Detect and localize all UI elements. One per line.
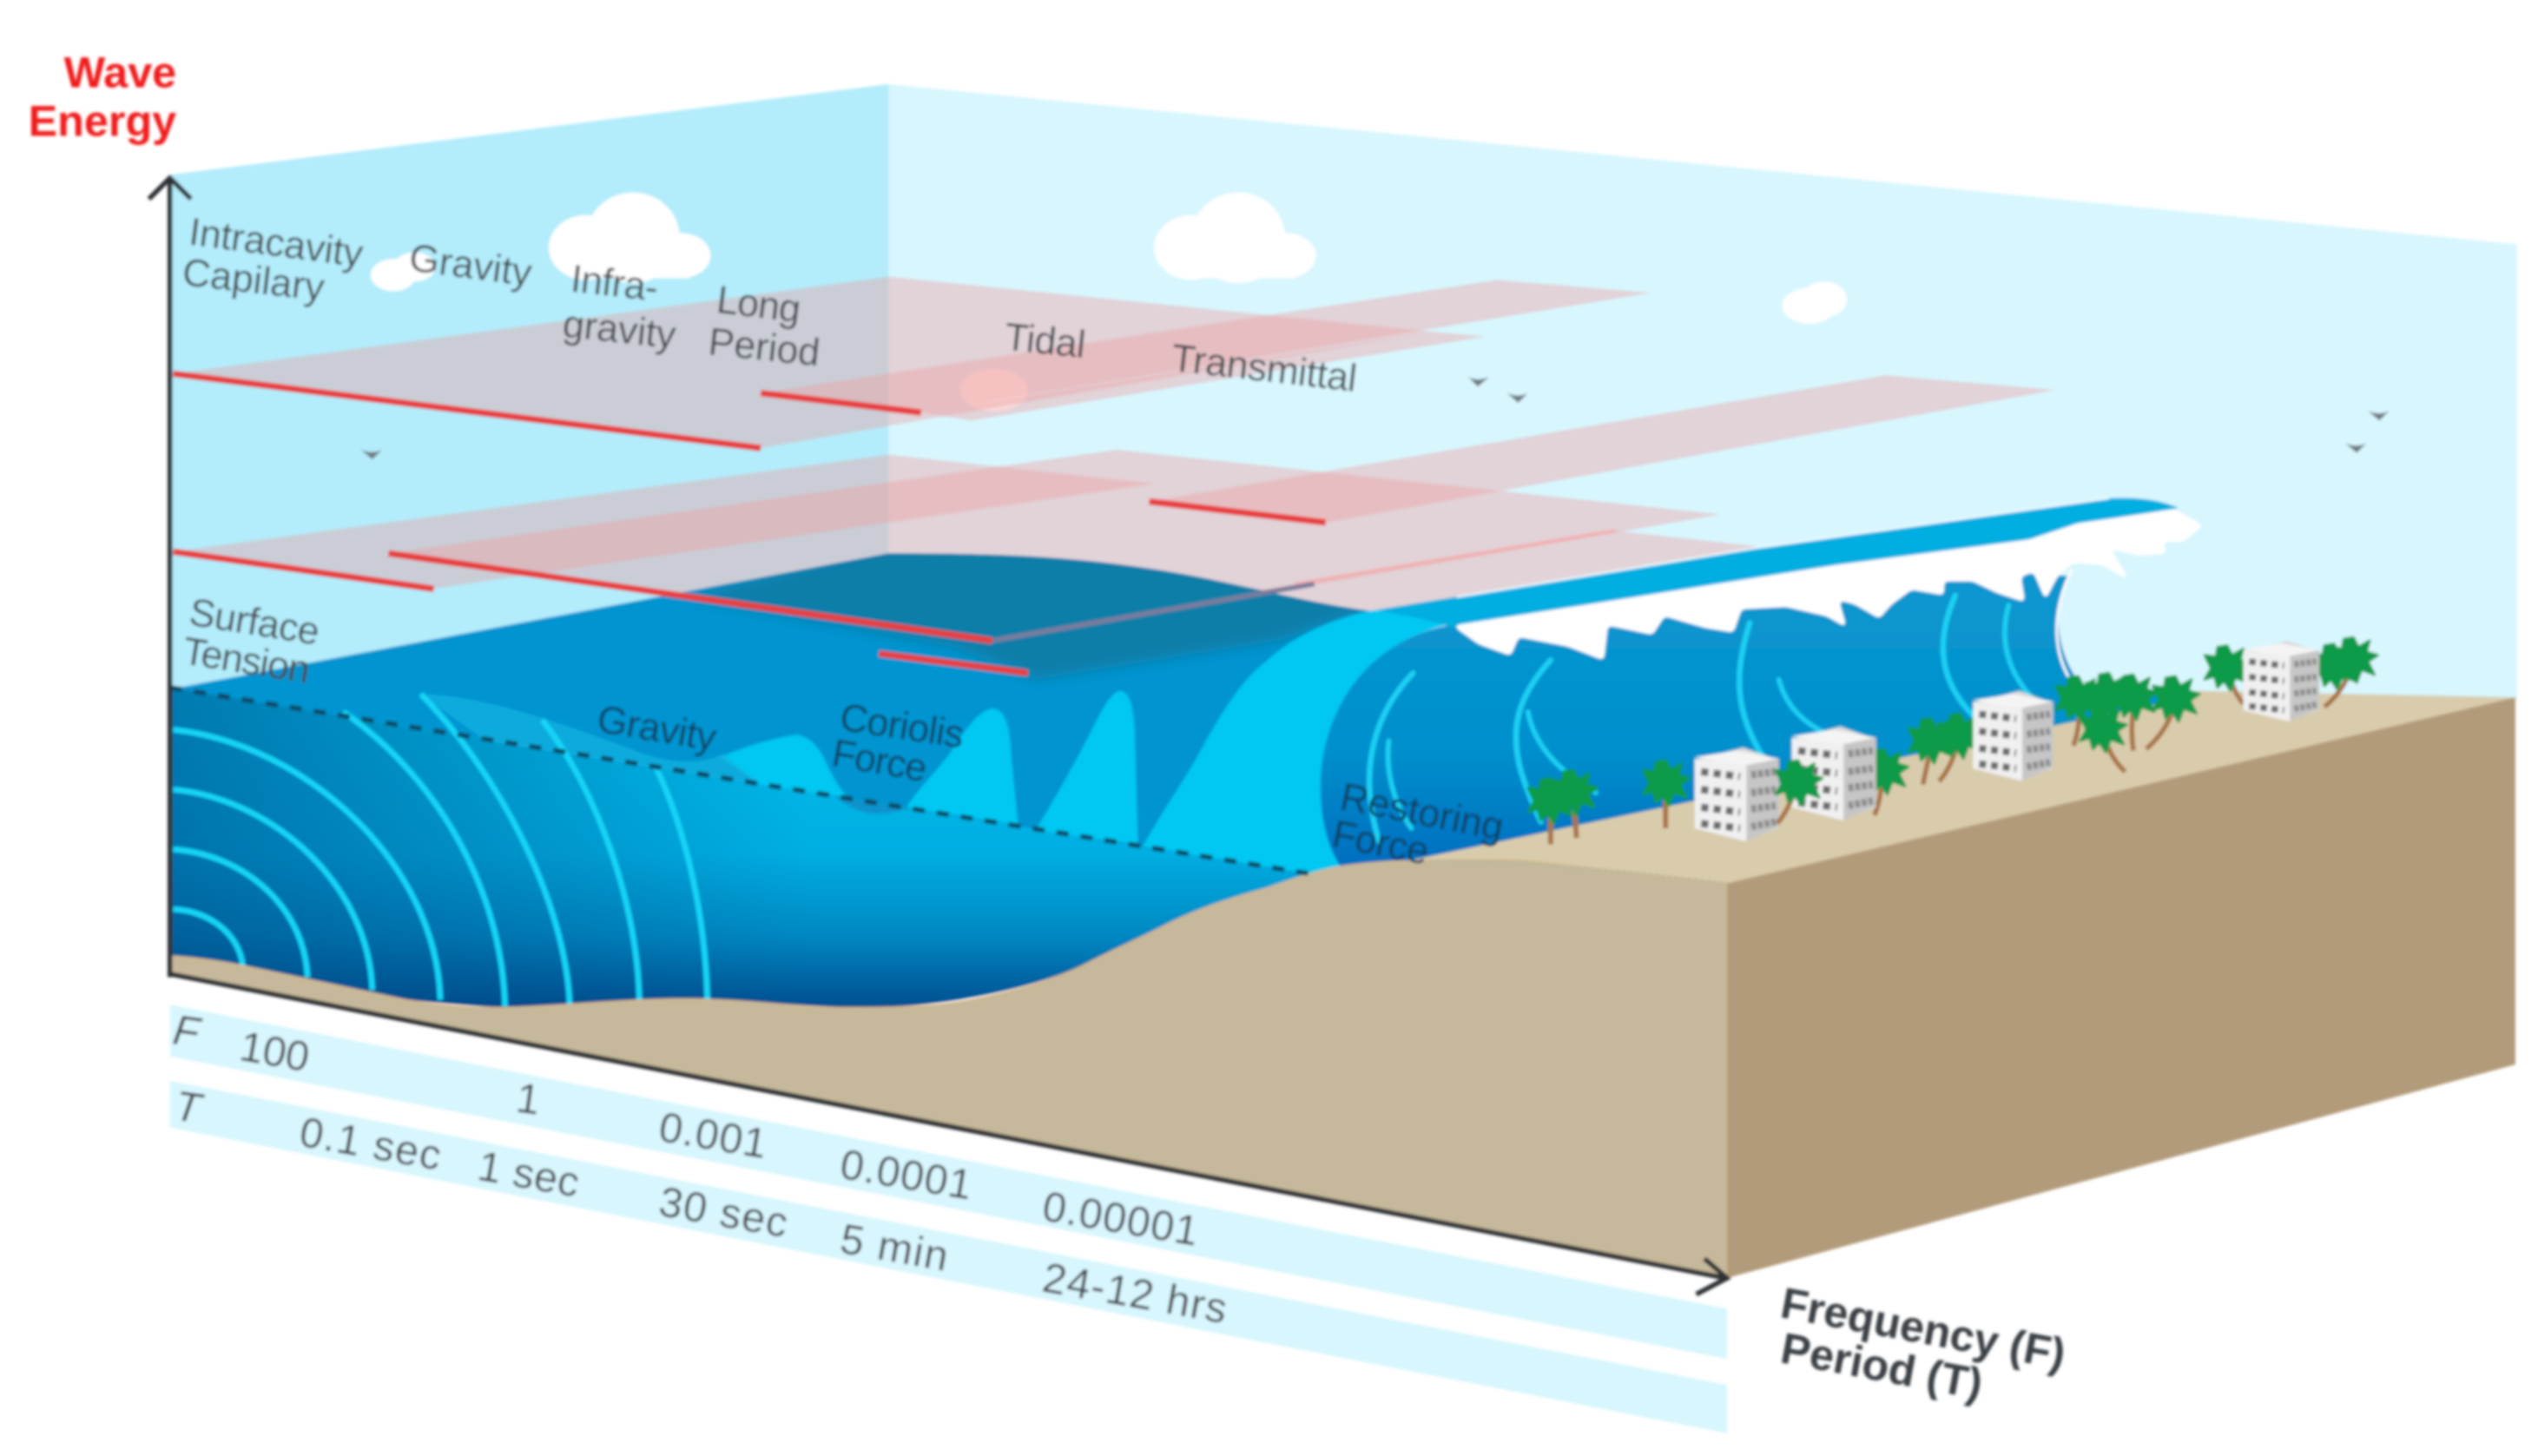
cloud: small left <box>371 253 435 291</box>
palm group around building 4 <box>2205 637 2377 707</box>
streak <box>1369 673 1413 841</box>
label: long period: Long <box>715 279 803 331</box>
arc 3 <box>173 789 372 990</box>
label: coriolis force: Force <box>829 732 930 790</box>
palm <box>1643 761 1690 828</box>
plane: transmittal band <box>1150 375 2055 523</box>
period scale values: 5 min <box>837 1216 952 1281</box>
horizontal axis arrow <box>170 974 1727 1295</box>
wave type labels <box>180 211 1507 873</box>
plane: intracavity capillary and gravity <box>173 277 1433 448</box>
red line 1 <box>173 373 761 448</box>
vertical axis arrow <box>149 178 191 977</box>
red line 2 <box>761 393 921 412</box>
gravity swell shoulder <box>421 694 761 785</box>
axis title: frequency and period: Period (T) <box>1777 1323 1987 1409</box>
palm in front of buildings <box>1776 761 1823 823</box>
bird <box>361 450 382 459</box>
birds <box>361 377 2389 459</box>
label: coriolis force <box>829 696 966 790</box>
frequency scale values: 100 <box>236 1023 313 1081</box>
muted edge of lower plane over water <box>992 584 1315 641</box>
beach top surface <box>1337 691 2515 885</box>
palm group near restoring force <box>1528 770 1598 845</box>
palm group behind building 2 <box>1862 714 1984 815</box>
scale band: period <box>170 1081 1727 1433</box>
cloud: large centre <box>1154 193 1316 283</box>
coriolis dip lobe <box>834 796 920 814</box>
period scale values <box>172 1083 1230 1333</box>
swell peaks <box>721 609 1457 875</box>
red line 4 <box>388 553 992 641</box>
sand cross-section front face <box>170 860 1727 1278</box>
red energy lines <box>173 373 1326 673</box>
clouds <box>371 193 1847 411</box>
red line 5 <box>1150 502 1326 523</box>
label: restoring force: Force <box>1328 813 1433 873</box>
building 4 <box>2244 641 2319 721</box>
label: infragravity <box>561 258 678 357</box>
label: transmittal: Transmittal <box>1170 337 1359 400</box>
label: long period: Period <box>707 320 822 374</box>
plane: tidal secondary band <box>921 332 1486 420</box>
bird <box>2345 444 2366 453</box>
water front face <box>170 688 1343 1008</box>
dark back water wedge <box>686 542 1392 680</box>
cloud: small behind plane <box>959 369 1028 411</box>
frequency scale values: 1 <box>513 1075 543 1124</box>
streak <box>1516 660 1551 822</box>
label: intracavity capillary: Capilary <box>181 251 327 310</box>
label: long period <box>707 279 822 374</box>
label: infragravity: gravity <box>561 303 678 357</box>
label: gravity: Gravity <box>406 237 535 295</box>
plane: tidal band <box>761 280 1651 412</box>
label: coriolis force: Coriolis <box>837 696 966 756</box>
streak <box>1528 712 1596 793</box>
label: infragravity: Infra- <box>569 258 661 310</box>
frequency scale values: 0.00001 <box>1039 1183 1202 1255</box>
label: intracavity capillary: Intracavity <box>187 211 366 276</box>
red line 3 <box>173 551 434 589</box>
plane: gravity band <box>388 450 1721 641</box>
beach dotted transition <box>1429 860 1727 883</box>
red line 6 <box>879 654 1028 673</box>
period scale values: 1 sec <box>474 1143 583 1207</box>
label: surface tension: Surface <box>187 591 322 654</box>
palm group behind building 3 <box>2055 673 2199 772</box>
energy planes <box>173 277 2055 673</box>
building 2 <box>1792 727 1876 820</box>
streak <box>2005 605 2033 699</box>
arc 8 <box>656 767 708 1000</box>
frequency scale values: 0.0001 <box>837 1141 975 1209</box>
period scale values: 24-12 hrs <box>1039 1255 1230 1333</box>
wave crest band <box>1376 497 2179 628</box>
streak <box>1388 741 1412 828</box>
period scale values: T <box>172 1083 207 1133</box>
cloud: large left <box>549 193 710 283</box>
arc 2 <box>173 849 307 977</box>
bird <box>1468 377 1489 386</box>
label: restoring force: Restoring <box>1337 775 1507 849</box>
white foam <box>1453 510 2204 661</box>
plane: surface tension band <box>173 455 1156 589</box>
arc 5 <box>343 712 505 1006</box>
arc 4 <box>173 729 440 1000</box>
arc 7 <box>542 720 639 1001</box>
plane edge highlight <box>1295 530 1615 584</box>
arc 1 <box>173 909 243 965</box>
wave inner streaks <box>1369 596 2033 841</box>
crest top highlight <box>1457 498 2109 597</box>
frequency scale values <box>170 1006 1202 1255</box>
streak <box>1943 596 1978 720</box>
label: intracavity capillary <box>181 211 366 310</box>
palm trees and buildings <box>1528 637 2377 845</box>
bird <box>1507 393 1528 403</box>
label: tidal: Tidal <box>1003 316 1088 366</box>
period scale values: 30 sec <box>656 1178 791 1247</box>
axis title: wave energy: Energy <box>29 96 176 146</box>
back wall of sky box <box>888 84 2517 702</box>
building 3 <box>1973 691 2053 781</box>
plane: lower long period band <box>879 530 1761 673</box>
label: surface tension: Tension <box>180 629 313 692</box>
streak <box>1739 623 1774 774</box>
water surface <box>170 553 1376 882</box>
scale band: frequency <box>170 1005 1727 1359</box>
label: surface tension <box>180 591 322 692</box>
streak <box>1779 680 1824 733</box>
frequency scale values: 0.001 <box>656 1104 770 1168</box>
cloud: small right <box>1782 281 1847 324</box>
wave back edge highlight <box>2057 570 2080 693</box>
left wall of sky box <box>170 84 888 693</box>
label: gravity restoring force: Gravity <box>594 698 720 760</box>
dashed still water line <box>170 688 1319 875</box>
building 1 <box>1695 748 1779 841</box>
big wave face <box>1321 558 2199 873</box>
wave arcs in water <box>173 694 708 1006</box>
axis title: wave energy <box>29 48 176 146</box>
frequency scale values: F <box>170 1006 204 1057</box>
axis title: wave energy: Wave <box>64 48 176 97</box>
sand right face <box>1727 697 2515 1278</box>
axis title: frequency and period: Frequency (F) <box>1777 1278 2069 1379</box>
period scale values: 0.1 sec <box>296 1109 445 1180</box>
arc 6 <box>421 694 570 1006</box>
bird <box>2368 411 2389 420</box>
